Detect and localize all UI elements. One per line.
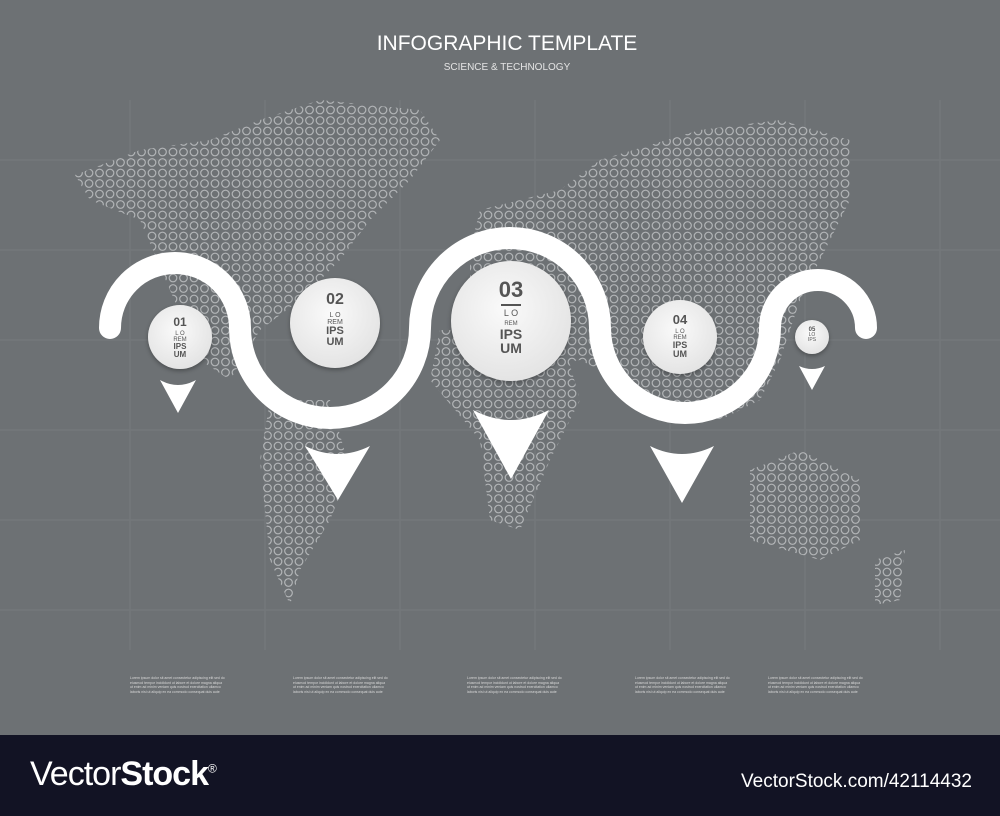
text blocks: Lorem ipsum dolor sit amet consectetur adipiscing elit sed do eiusmod tempor incididunt ut labore et dolore magna aliqua ut enim ad minim veniam quis nostrud exercitation ullamco laboris nisi ut aliquip ex ea commodo consequat duis aute [293, 676, 388, 694]
title: INFOGRAPHIC TEMPLATE [377, 32, 637, 55]
circle 05: IPS [808, 337, 816, 343]
circle 03: UM [500, 340, 522, 356]
circle 01: REM [173, 337, 187, 343]
circle 03: IPS [500, 326, 522, 342]
circle 01: IPS [174, 342, 186, 351]
subtitle: SCIENCE & TECHNOLOGY [444, 62, 570, 73]
circle 03: 03 [499, 277, 523, 302]
circle 02: REM [327, 319, 343, 326]
text blocks: Lorem ipsum dolor sit amet consectetur adipiscing elit sed do eiusmod tempor incididunt ut labore et dolore magna aliqua ut enim ad minim veniam quis nostrud exercitation ullamco laboris nisi ut aliquip ex ea commodo consequat duis aute [635, 676, 730, 694]
circle 03: REM [504, 321, 518, 327]
text blocks: Lorem ipsum dolor sit amet consectetur adipiscing elit sed do eiusmod tempor incididunt ut labore et dolore magna aliqua ut enim ad minim veniam quis nostrud exercitation ullamco laboris nisi ut aliquip ex ea commodo consequat duis aute [467, 676, 562, 694]
text blocks: Lorem ipsum dolor sit amet consectetur adipiscing elit sed do eiusmod tempor incididunt ut labore et dolore magna aliqua ut enim ad minim veniam quis nostrud exercitation ullamco laboris nisi ut aliquip ex ea commodo consequat duis aute [768, 676, 863, 694]
circle 03 [451, 261, 571, 381]
map and wave graphic [75, 100, 905, 604]
circle 05 [795, 320, 829, 354]
footer url: VectorStock.com/42114432 [741, 771, 972, 792]
footer [0, 735, 1000, 816]
circle 04: L O [675, 329, 685, 335]
circle 01: UM [174, 350, 186, 359]
circle 02 [290, 278, 380, 368]
circle 03: L O [504, 308, 518, 318]
wave path [110, 238, 866, 418]
footer logo: VectorStock® [30, 755, 216, 793]
circle 04: 04 [673, 312, 687, 327]
circle 04 [643, 300, 717, 374]
circle 02: UM [326, 336, 344, 348]
circle 04: REM [673, 335, 687, 341]
circle 01: L O [175, 331, 185, 337]
circle 02: 02 [326, 291, 344, 308]
text blocks: Lorem ipsum dolor sit amet consectetur adipiscing elit sed do eiusmod tempor incididunt ut labore et dolore magna aliqua ut enim ad minim veniam quis nostrud exercitation ullamco laboris nisi ut aliquip ex ea commodo consequat duis aute [130, 676, 225, 694]
circle 04: UM [673, 349, 687, 359]
circle 04: IPS [673, 340, 687, 350]
text blocks [130, 676, 863, 694]
circle 02: IPS [326, 325, 344, 337]
circle 05: LO [809, 332, 815, 338]
arrow pointers [160, 366, 825, 503]
circle 01: 01 [173, 315, 187, 329]
world map dots [75, 100, 905, 604]
circle 02: L O [329, 312, 341, 319]
circle 05: 05 [809, 327, 815, 333]
circle 01 [148, 305, 212, 369]
